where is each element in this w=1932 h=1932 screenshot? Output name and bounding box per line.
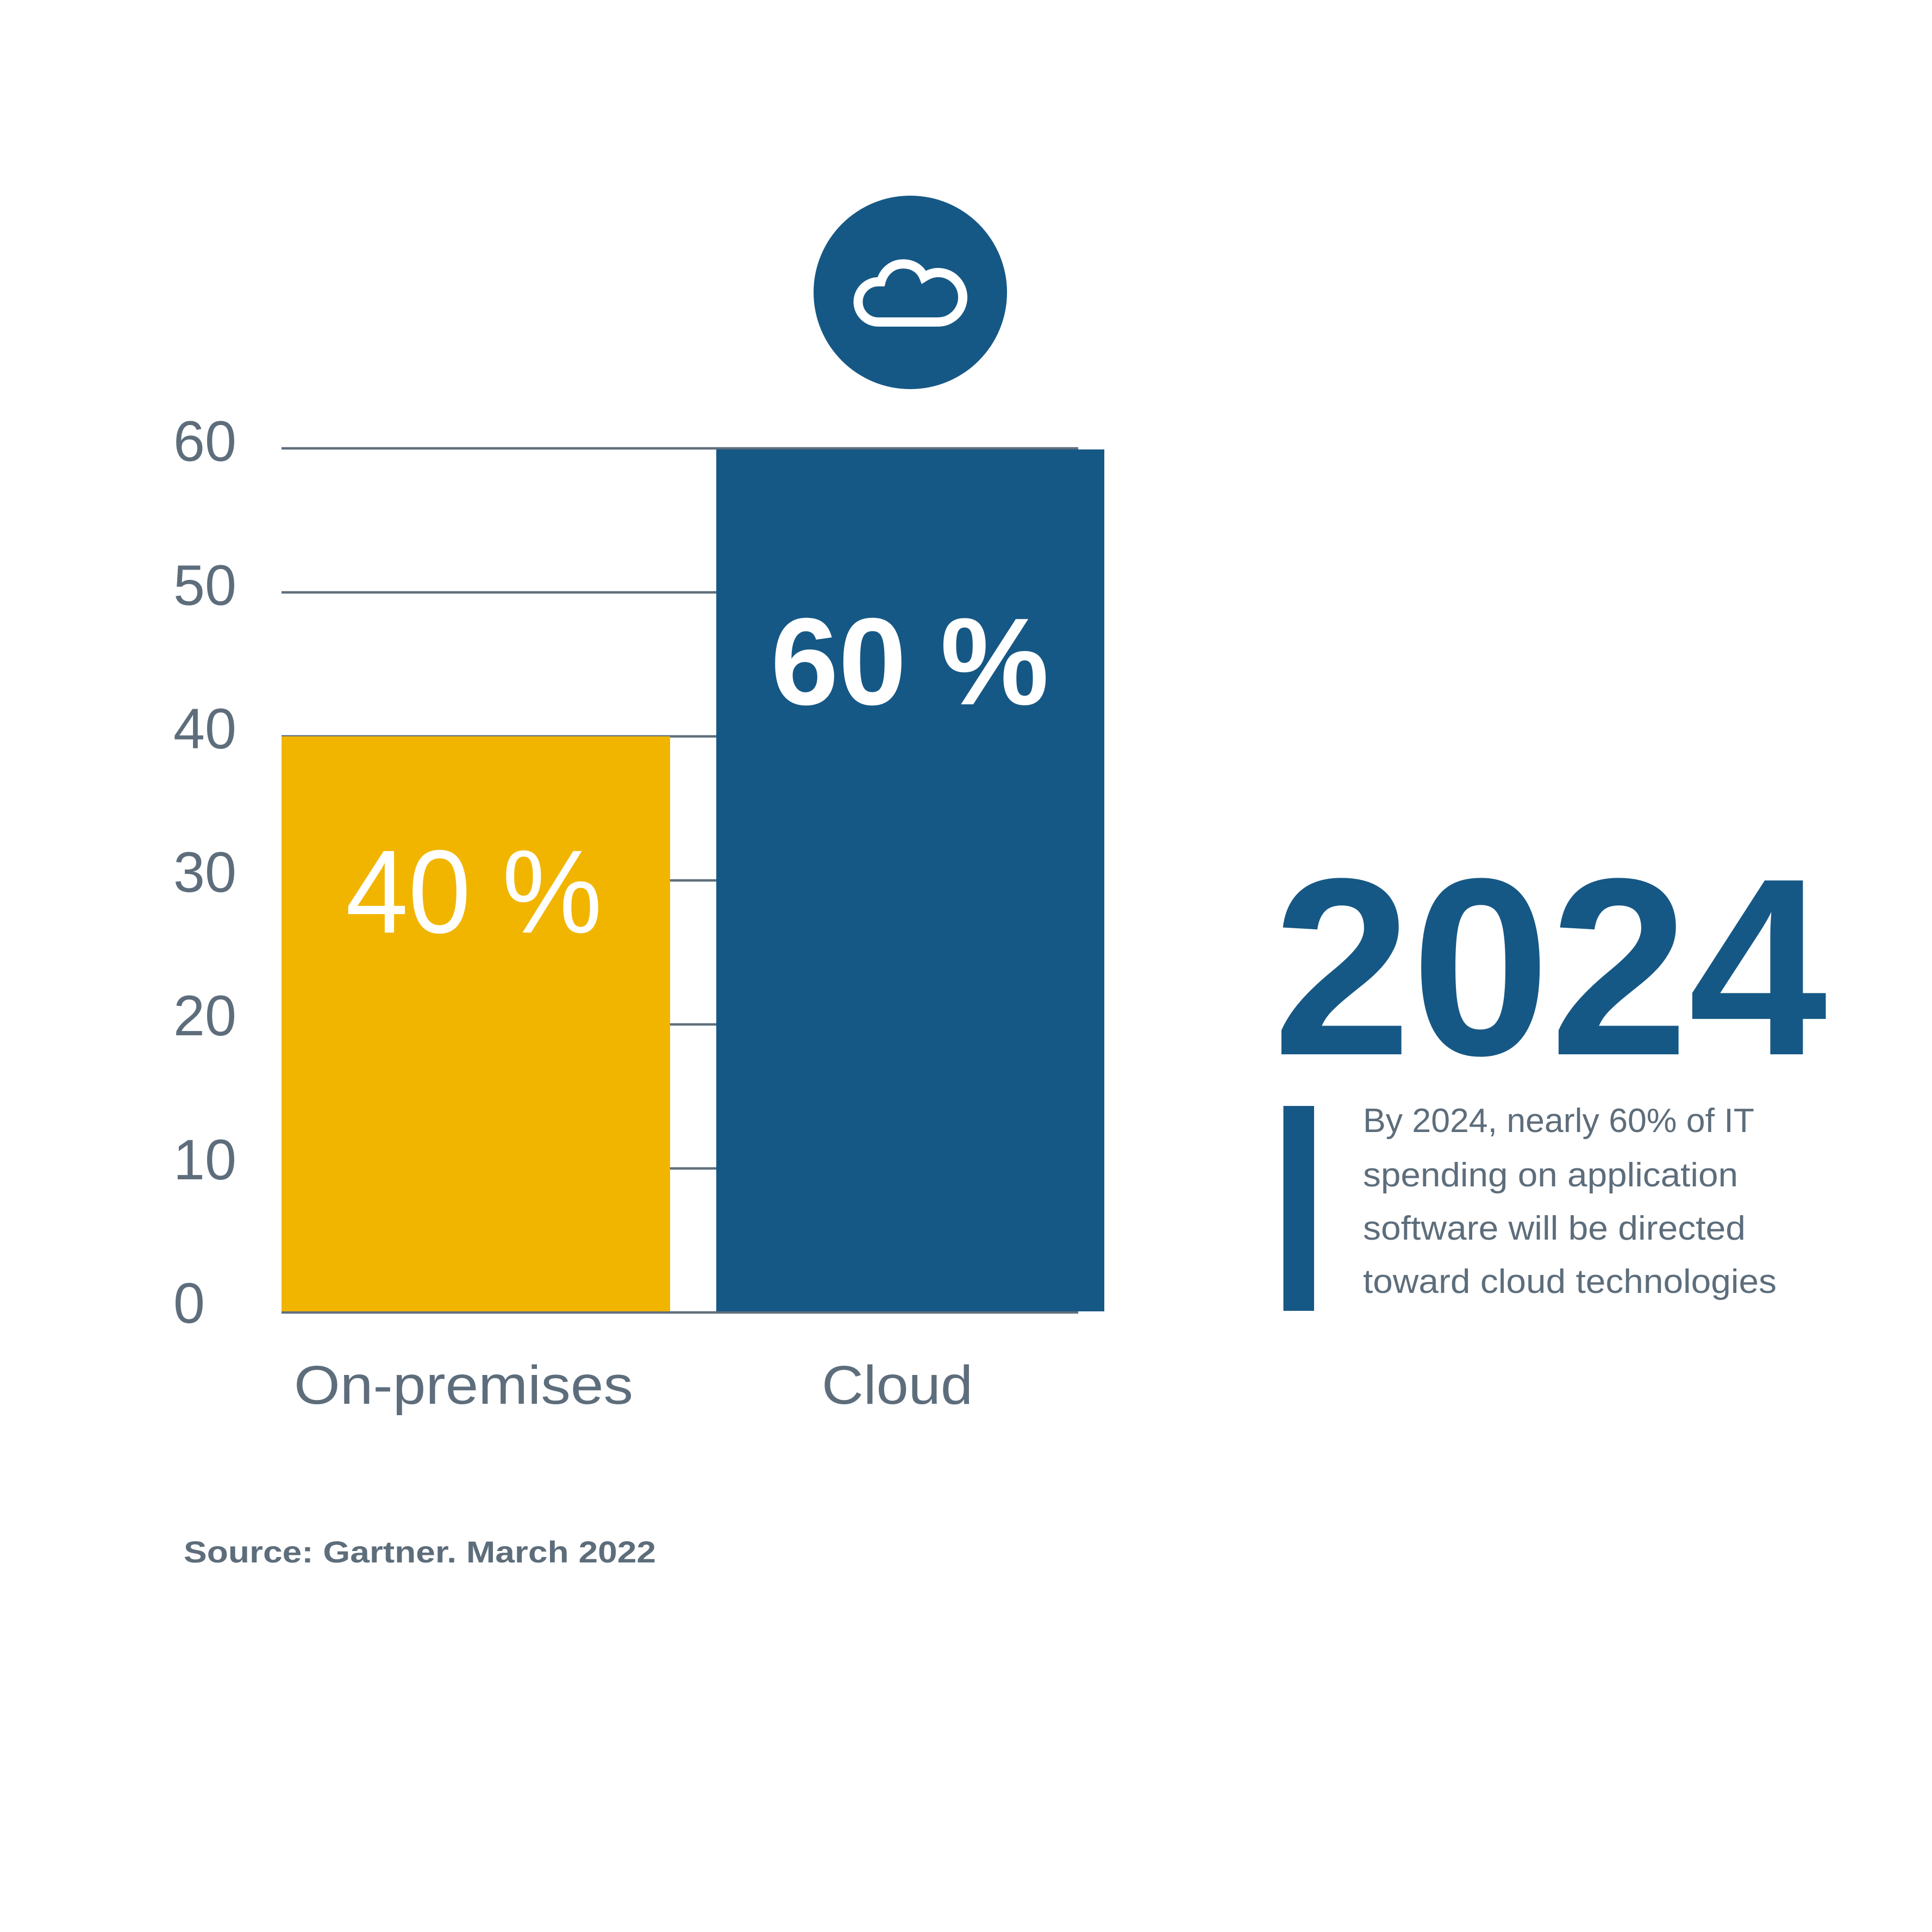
y-axis labels: 0	[173, 1272, 205, 1335]
y-axis labels: 20	[173, 984, 236, 1048]
category label: On-premises: On-premises	[294, 1355, 633, 1416]
value label: 40 %: 40 %	[346, 826, 602, 958]
bar: cloud	[716, 449, 1104, 1311]
bar chart	[173, 410, 1104, 1416]
y-axis labels: 10	[173, 1128, 236, 1192]
description text	[1363, 1102, 1777, 1300]
description text: software will be directed	[1363, 1210, 1746, 1247]
y-axis labels: 40	[173, 697, 236, 761]
source note: Source: Gartner. March 2022	[184, 1535, 656, 1569]
y-axis labels	[173, 410, 236, 1335]
accent bar	[1284, 1106, 1314, 1311]
description text: By 2024, nearly 60% of IT	[1363, 1102, 1754, 1140]
heading: 2024: 2024	[1273, 826, 1829, 1108]
y-axis labels: 60	[173, 410, 236, 473]
value label: 60 %: 60 %	[771, 593, 1049, 731]
description text: toward cloud technologies	[1363, 1263, 1777, 1300]
y-axis labels: 50	[173, 554, 236, 617]
description text: spending on application	[1363, 1156, 1738, 1194]
callout: 2024	[1273, 826, 1829, 1311]
category label: Cloud: Cloud	[822, 1355, 973, 1416]
y-axis labels: 30	[173, 841, 236, 904]
icon: cloud in circle	[814, 196, 1007, 389]
bar: on-premises	[282, 736, 670, 1311]
